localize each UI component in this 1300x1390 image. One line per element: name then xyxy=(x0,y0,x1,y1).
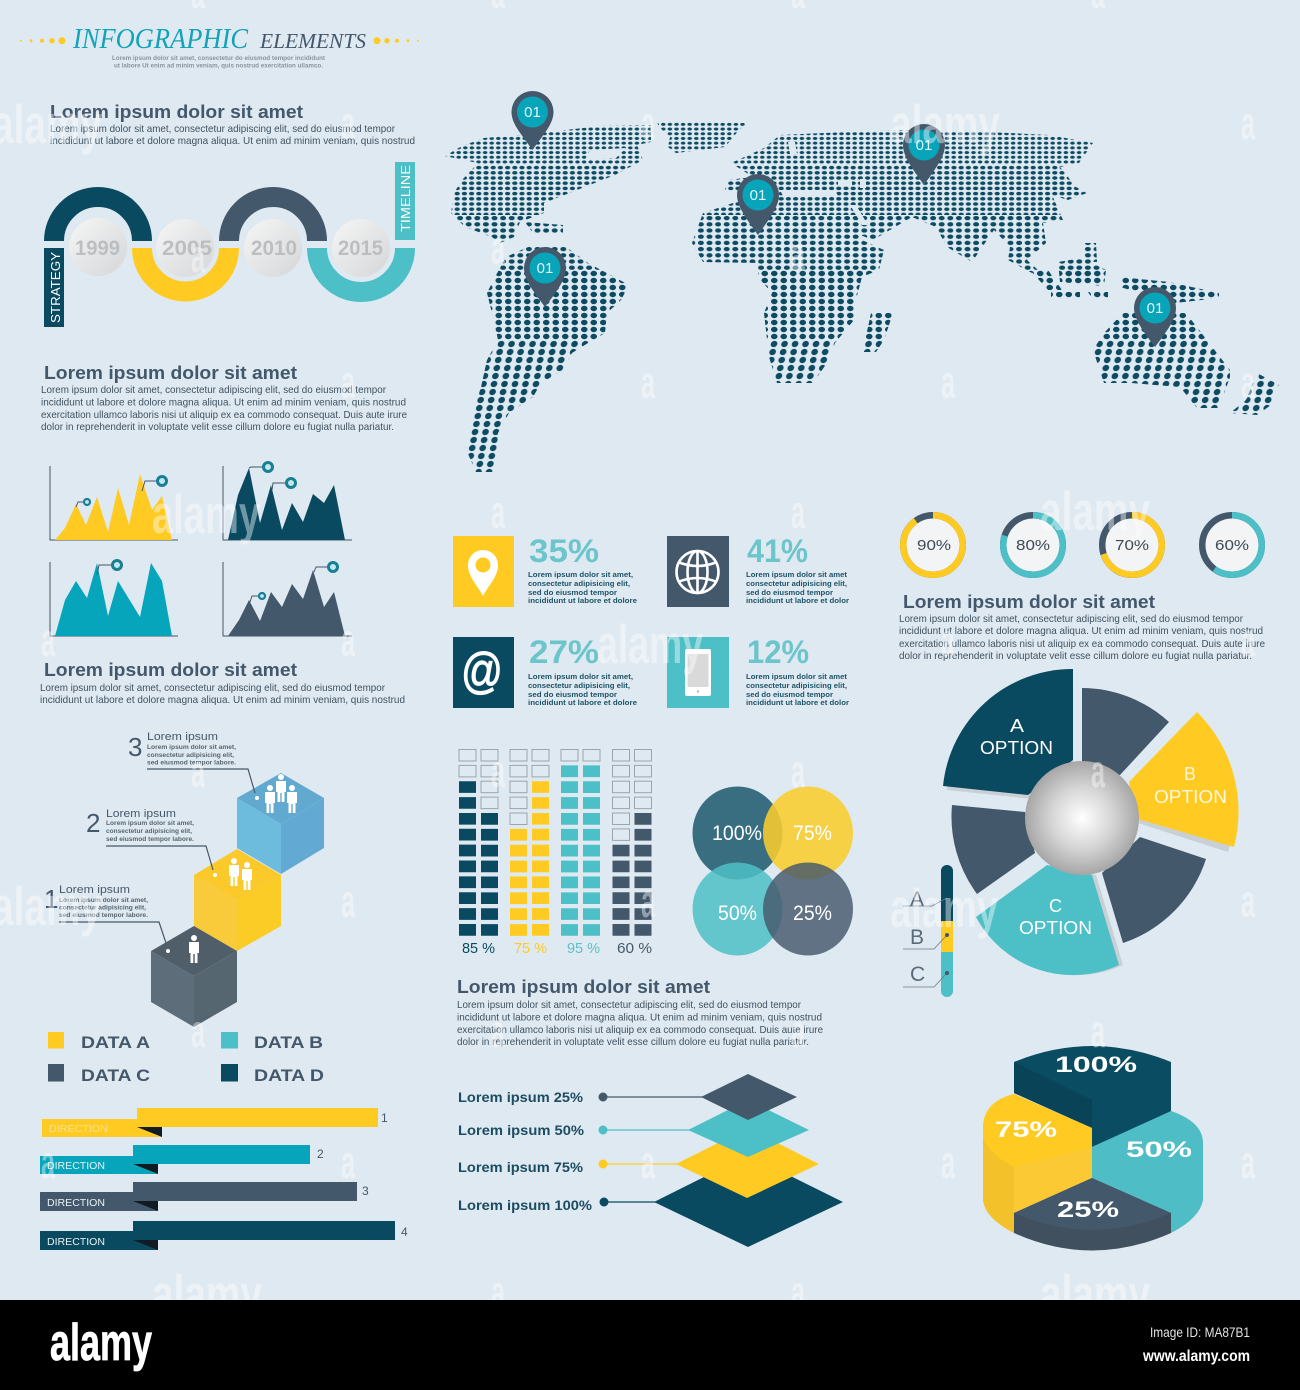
direction bar 4: 4 xyxy=(401,1225,408,1239)
watermarks: a xyxy=(341,875,355,927)
watermarks: a xyxy=(1241,875,1255,927)
stat: 27 percent: 27% xyxy=(529,634,599,670)
direction bar 1: DIRECTION xyxy=(49,1124,108,1135)
pie labels: OPTION xyxy=(980,738,1053,758)
legend: DATA B xyxy=(254,1033,323,1052)
abc scale bar: B xyxy=(910,926,924,949)
segment slate bottom right xyxy=(1102,837,1206,943)
watermarks: a xyxy=(341,614,355,666)
venn diagram: 75% xyxy=(793,822,832,845)
text block: steps intro: Lorem ipsum dolor sit amet, consectetur adipiscing elit, sed do eiusmod tempor xyxy=(40,682,385,694)
stat: 27 percent xyxy=(453,634,637,708)
map pin 3: 01 xyxy=(750,187,766,204)
step 1 text: sed eiusmod tempor labore. xyxy=(59,912,148,919)
step 1 text: consectetur adipisicing elit, xyxy=(59,904,146,912)
text block: charts intro: Lorem ipsum dolor sit amet, consectetur adipiscing elit, sed do eiusmod tempor xyxy=(41,384,386,396)
map pin 4 xyxy=(524,247,566,307)
map pin 2: 01 xyxy=(916,137,932,154)
step 2 text: Lorem ipsum xyxy=(106,808,176,820)
step 3 text: Lorem ipsum xyxy=(147,731,218,743)
footer bar: www.alamy.com xyxy=(1142,1348,1250,1365)
stat: 12 percent xyxy=(667,634,849,708)
leader lines xyxy=(59,769,255,943)
isometric labels: 100% xyxy=(1055,1052,1137,1077)
year discs: 1999 xyxy=(75,237,120,260)
bar percentage labels: 85 % xyxy=(462,941,495,957)
watermarks: a xyxy=(191,745,205,797)
footer bar: Image ID: MA87B1 xyxy=(1150,1324,1250,1340)
isometric labels: 50% xyxy=(1126,1137,1192,1162)
text block: pie intro: exercitation ullamco laboris nisi ut aliquip ex ea commodo consequat. Duis aute irure xyxy=(899,638,1265,650)
text block: pie intro: Lorem ipsum dolor sit amet, consectetur adipiscing elit, sed do eiusmod tempor xyxy=(899,613,1243,625)
teal block xyxy=(1092,1111,1203,1233)
stat: 41 percent: consectetur adipisicing elit, xyxy=(746,579,847,588)
text block: layers intro: exercitation ullamco laboris nisi ut aliquip ex ea commodo consequat. Duis aute irure xyxy=(457,1024,823,1036)
timeline tab: TIMELINE xyxy=(398,165,413,232)
step 3 text: consectetur adipisicing elit, xyxy=(147,752,234,759)
step 3 text: Lorem ipsum dolor sit amet, xyxy=(147,744,236,751)
watermarks: alamy xyxy=(1040,480,1150,542)
exploded pie chart xyxy=(943,669,1239,975)
map pin 5: 01 xyxy=(1147,300,1163,317)
segment slate left xyxy=(951,805,1035,894)
step 2 text: consectetur adipisicing elit, xyxy=(106,828,192,835)
legend: DATA D xyxy=(254,1066,324,1085)
legend xyxy=(48,1032,324,1085)
yellow block xyxy=(983,1094,1092,1233)
ring 70 percent xyxy=(1102,515,1162,575)
segment B xyxy=(1129,712,1239,847)
footer bar xyxy=(0,1300,1300,1390)
slate block xyxy=(1014,1178,1171,1250)
text block: charts intro: incididunt ut labore et dolore magna aliqua. Ut enim ad minim veniam, quis nostrud xyxy=(41,396,406,408)
stat: 27 percent: incididunt ut labore et dolore xyxy=(528,698,637,707)
stat: 12 percent: sed do eiusmod tempor xyxy=(746,690,833,699)
map pin 1 xyxy=(512,91,554,150)
ring 80 percent xyxy=(1003,515,1063,575)
stat: 27 percent: @ xyxy=(461,643,503,699)
footer bar: alamy xyxy=(50,1314,152,1372)
watermarks: a xyxy=(491,222,505,274)
layer diamonds xyxy=(654,1074,843,1247)
map pin 2 xyxy=(903,124,945,185)
watermarks: a xyxy=(1091,1005,1105,1057)
pie labels: A xyxy=(1010,716,1024,736)
text block: timeline intro: Lorem ipsum dolor sit amet xyxy=(50,102,303,122)
watermarks: a xyxy=(941,356,955,408)
text block: steps intro: incididunt ut labore et dolore magna aliqua. Ut enim ad minim veniam, quis nostrud xyxy=(40,694,405,706)
abc scale bar xyxy=(903,865,953,997)
direction bar 1: 1 xyxy=(381,1111,388,1125)
watermarks: a xyxy=(341,97,355,149)
stat: 12 percent: incididunt ut labore et dolor xyxy=(746,698,849,707)
isometric labels: 25% xyxy=(1057,1197,1119,1222)
text block: pie intro xyxy=(899,592,1265,662)
watermarks: a xyxy=(791,1005,805,1057)
bar percentage labels xyxy=(462,941,652,957)
bar percentage labels: 75 % xyxy=(514,941,547,957)
text block: timeline intro xyxy=(50,102,415,147)
map pin 3 xyxy=(737,174,779,235)
ring 80 percent: 80% xyxy=(1016,537,1050,554)
venn diagram: 100% xyxy=(712,822,762,845)
venn diagram: 25% xyxy=(793,902,832,925)
pie labels xyxy=(980,716,1227,938)
dark block xyxy=(1014,1046,1171,1147)
direction bar 4 xyxy=(40,1221,408,1250)
map pin 5 xyxy=(1134,287,1176,347)
stat: 35 percent xyxy=(453,533,637,607)
inland water gaps xyxy=(585,142,868,225)
pie labels: C xyxy=(1049,896,1062,916)
watermarks: a xyxy=(191,230,205,282)
watermarks: a xyxy=(941,614,955,666)
year discs xyxy=(69,218,390,277)
progress rings xyxy=(903,515,1262,575)
cube 3 blue xyxy=(237,773,324,874)
watermarks: a xyxy=(491,1266,505,1318)
pie labels: B xyxy=(1184,764,1196,784)
stat: 41 percent: incididunt ut labore et dolor xyxy=(746,596,849,605)
map pin 1: 01 xyxy=(524,104,541,121)
stat: 27 percent: consectetur adipisicing elit, xyxy=(528,681,630,690)
ring 90 percent: 90% xyxy=(917,537,951,554)
direction bar 3 xyxy=(40,1182,369,1211)
people icons xyxy=(166,774,297,963)
direction bar 2: 2 xyxy=(317,1147,324,1161)
text block: layers intro: incididunt ut labore et dolore magna aliqua. Ut enim ad minim veniam, quis nostrud xyxy=(457,1012,822,1024)
direction bar 3: DIRECTION xyxy=(47,1198,105,1209)
legend: DATA C xyxy=(81,1066,150,1085)
filled cells xyxy=(468,765,643,936)
area chart: teal xyxy=(50,560,178,636)
watermarks: a xyxy=(191,1005,205,1057)
watermarks: a xyxy=(791,1266,805,1318)
step 2 text: Lorem ipsum dolor sit amet, xyxy=(106,820,194,827)
stat: 27 percent: Lorem ipsum dolor sit amet, xyxy=(528,672,633,681)
watermarks: a xyxy=(1241,614,1255,666)
stacked layers diagram xyxy=(458,1074,843,1247)
text block: layers intro: Lorem ipsum dolor sit amet, consectetur adipiscing elit, sed do eiusmod tempor xyxy=(457,999,801,1011)
text block: charts intro: Lorem ipsum dolor sit amet xyxy=(44,363,297,383)
stat: 41 percent xyxy=(667,533,849,607)
cube 2 yellow xyxy=(194,849,281,951)
pie labels: OPTION xyxy=(1019,918,1092,938)
text block: steps intro: Lorem ipsum dolor sit amet xyxy=(44,660,297,680)
text block: layers intro: Lorem ipsum dolor sit amet xyxy=(457,977,710,997)
watermarks: a xyxy=(41,1136,55,1188)
arches xyxy=(54,197,405,292)
watermarks: a xyxy=(641,875,655,927)
layer labels: Lorem ipsum 75% xyxy=(458,1160,583,1175)
step 1 text xyxy=(44,884,148,919)
empty cells xyxy=(459,750,652,840)
year discs: 2015 xyxy=(338,237,383,260)
bar percentage labels: 95 % xyxy=(567,941,600,957)
centre sphere xyxy=(1025,761,1139,875)
step 3 text xyxy=(128,731,236,766)
watermarks: a xyxy=(491,1005,505,1057)
isometric steps xyxy=(44,731,324,1027)
watermarks: a xyxy=(341,356,355,408)
watermarks: a xyxy=(341,1136,355,1188)
direction bar 1 xyxy=(42,1108,388,1137)
timeline tab xyxy=(395,162,415,240)
watermarks: a xyxy=(791,745,805,797)
layer labels xyxy=(458,1090,592,1213)
ring 60 percent: 60% xyxy=(1215,537,1249,554)
watermarks: alamy xyxy=(890,877,998,939)
layer labels: Lorem ipsum 100% xyxy=(458,1198,592,1213)
stat: 12 percent: 12% xyxy=(747,634,809,670)
watermarks: a xyxy=(641,1136,655,1188)
text block: layers intro: dolor in reprehenderit in voluptate velit esse cillum dolore eu fugiat nulla pariatur. xyxy=(457,1036,809,1048)
watermarks: alamy xyxy=(152,483,260,545)
text block: pie intro: incididunt ut labore et dolore magna aliqua. Ut enim ad minim veniam, quis nostrud xyxy=(899,625,1263,637)
stat: 41 percent: sed do eiusmod tempor xyxy=(746,588,833,597)
watermarks: a xyxy=(41,614,55,666)
stat: 35 percent: sed do eiusmod tempor xyxy=(528,588,617,597)
text block: charts intro xyxy=(41,363,407,433)
year discs: 2010 xyxy=(251,237,297,260)
ring 90 percent xyxy=(903,515,963,575)
watermarks: a xyxy=(1241,97,1255,149)
direction bar 4: DIRECTION xyxy=(47,1237,105,1248)
decorative dots xyxy=(20,37,419,44)
step 2 text: sed eiusmod tempor labore. xyxy=(106,836,194,843)
abc scale bar: A xyxy=(910,888,924,911)
area chart: yellow xyxy=(50,466,178,540)
stat: 35 percent: 35% xyxy=(529,533,599,569)
strategy tab xyxy=(44,248,64,327)
area chart: dark teal xyxy=(223,462,352,540)
title: ELEMENTS xyxy=(259,29,367,53)
segment shadows xyxy=(947,673,1234,975)
venn diagram xyxy=(692,786,853,956)
watermarks: alamy xyxy=(597,613,703,675)
stat: 41 percent: Lorem ipsum dolor sit amet xyxy=(746,570,848,579)
block bar chart xyxy=(459,750,652,957)
segment A xyxy=(943,669,1073,795)
map pin 4: 01 xyxy=(537,260,553,277)
watermarks: a xyxy=(791,228,805,280)
area chart: slate xyxy=(223,562,352,636)
stat: 12 percent: Lorem ipsum dolor sit amet xyxy=(746,672,848,681)
ring 70 percent: 70% xyxy=(1115,537,1149,554)
strategy tab: STRATEGY xyxy=(48,252,63,323)
stat: 27 percent: sed do eiusmod tempor xyxy=(528,690,617,699)
step 2 text xyxy=(86,808,194,843)
watermarks: a xyxy=(641,97,655,149)
title: ut labore Ut enim ad minim veniam, quis nostrud exercitation ullamco. xyxy=(114,64,323,70)
watermarks: a xyxy=(941,1136,955,1188)
layer labels: Lorem ipsum 25% xyxy=(458,1090,583,1105)
watermarks: a xyxy=(1241,356,1255,408)
watermarks: a xyxy=(791,486,805,538)
direction bar 2 xyxy=(40,1145,324,1174)
watermarks: a xyxy=(491,745,505,797)
watermarks: a xyxy=(491,486,505,538)
watermarks: a xyxy=(641,356,655,408)
ring 60 percent xyxy=(1202,515,1262,575)
step 3 text: sed eiusmod tempor labore. xyxy=(147,760,236,766)
direction bar 2: DIRECTION xyxy=(47,1161,105,1172)
text block: charts intro: dolor in reprehenderit in voluptate velit esse cillum dolore eu fugiat nulla pariatur. xyxy=(41,421,394,433)
isometric labels: 75% xyxy=(995,1117,1057,1142)
watermarks: alamy xyxy=(1040,1263,1150,1325)
bar percentage labels: 60 % xyxy=(617,941,652,957)
timeline chart xyxy=(44,162,415,327)
title: INFOGRAPHIC xyxy=(72,24,248,55)
step 1 text: 1 xyxy=(44,884,58,914)
isometric pie chart xyxy=(983,1046,1203,1250)
title xyxy=(20,24,419,70)
text block: pie intro: dolor in reprehenderit in voluptate velit esse cillum dolore eu fugiat nulla pariatur. xyxy=(899,650,1252,662)
icon statistics xyxy=(453,533,849,708)
text block: steps intro xyxy=(40,660,405,706)
step 3 text: 3 xyxy=(128,732,142,762)
year discs: 2005 xyxy=(162,237,212,260)
layer labels: Lorem ipsum 50% xyxy=(458,1123,584,1138)
watermarks: alamy xyxy=(152,1263,262,1325)
cube 1 slate xyxy=(151,926,237,1027)
isometric labels xyxy=(995,1052,1192,1222)
stat: 35 percent: consectetur adipisicing elit, xyxy=(528,579,630,588)
watermarks: a xyxy=(1241,1136,1255,1188)
layer leader lines xyxy=(598,1092,705,1206)
step 1 text: Lorem ipsum dolor sit amet, xyxy=(59,897,148,904)
title: Lorem ipsum dolor sit amet, consectetur do eiusmod tempor incididunt xyxy=(112,56,325,62)
step 1 text: Lorem ipsum xyxy=(59,884,130,896)
pie labels: OPTION xyxy=(1154,787,1227,807)
abc scale bar: C xyxy=(910,963,925,986)
step 2 text: 2 xyxy=(86,808,100,838)
venn diagram: 50% xyxy=(718,902,757,925)
stat: 35 percent: Lorem ipsum dolor sit amet, xyxy=(528,570,633,579)
stat: 12 percent: consectetur adipisicing elit, xyxy=(746,681,847,690)
direction bars xyxy=(40,1108,408,1250)
watermarks: a xyxy=(1091,745,1105,797)
text block: timeline intro: Lorem ipsum dolor sit amet, consectetur adipiscing elit, sed do eiusmod tempor xyxy=(50,123,395,135)
text block: layers intro xyxy=(457,977,823,1048)
dotted world map xyxy=(440,91,1300,480)
text block: timeline intro: incididunt ut labore et dolore magna aliqua. Ut enim ad minim veniam, quis nostrud xyxy=(50,135,415,147)
stat: 41 percent: 41% xyxy=(747,533,808,569)
legend: DATA A xyxy=(81,1033,150,1052)
stat: 35 percent: incididunt ut labore et dolore xyxy=(528,596,637,605)
segment C xyxy=(976,865,1119,975)
segment slate top xyxy=(1082,688,1169,775)
direction bar 3: 3 xyxy=(362,1184,369,1198)
text block: charts intro: exercitation ullamco laboris nisi ut aliquip ex ea commodo consequat. Duis aute irure xyxy=(41,409,407,421)
watermarks: alamy xyxy=(890,93,1000,155)
text block: pie intro: Lorem ipsum dolor sit amet xyxy=(903,592,1155,612)
